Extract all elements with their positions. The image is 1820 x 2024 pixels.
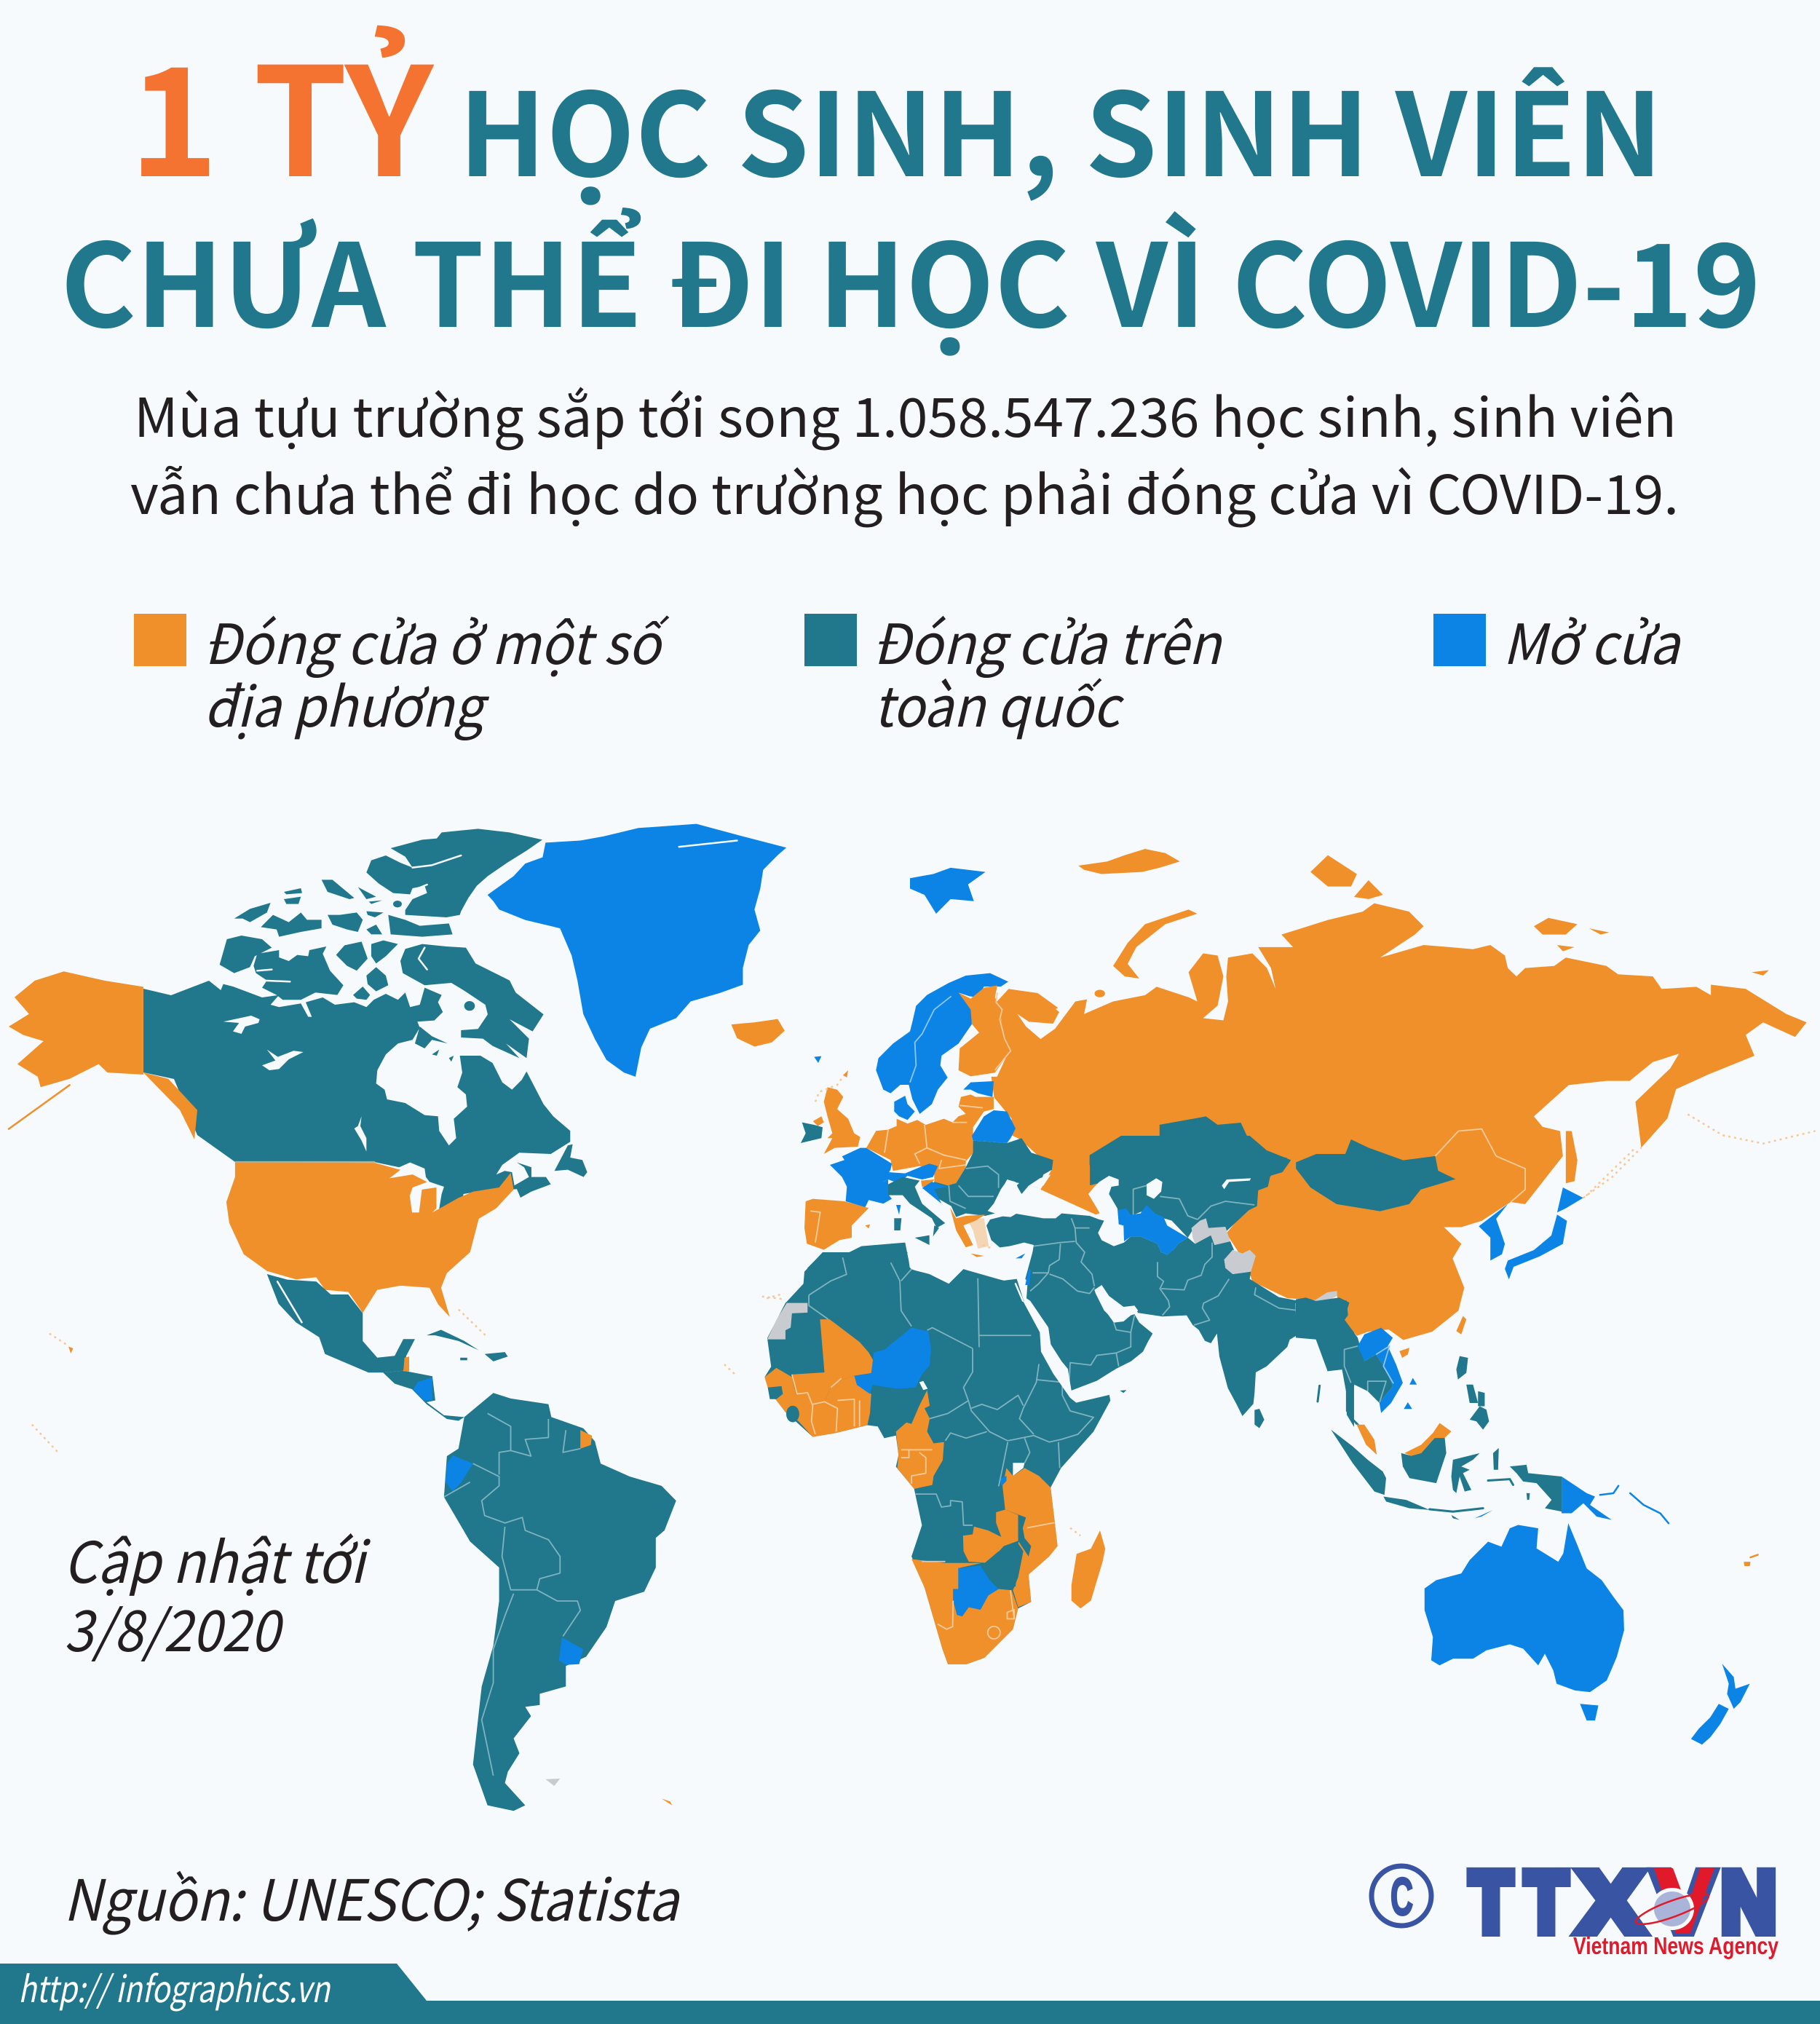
islands: Arctic Russia (1078, 849, 1769, 1183)
Laos and Vietnam (1358, 1328, 1403, 1413)
Turkmenistan (1117, 1205, 1188, 1254)
logo inner red V (1654, 1868, 1714, 1933)
Balearic islands (865, 1225, 870, 1228)
Baffin Island (400, 944, 544, 1058)
TTXVN logo: N (1721, 1854, 1776, 1950)
Tasmania (1580, 1704, 1599, 1720)
subtitle text: Mùa tựu trường sắp tới song 1.058.547.236 học sinh, sinh viên (134, 375, 1677, 453)
small Pacific and Atlantic islands (32, 1334, 737, 1806)
TTXVN logo: V (1653, 1854, 1714, 1950)
Alaska (9, 971, 143, 1087)
Indonesian Papua (1510, 1465, 1562, 1511)
Kazakhstan and central Asia (1090, 1136, 1291, 1238)
Namibia and South Africa (911, 1559, 1018, 1664)
map: Greenland and Iceland (488, 824, 786, 1077)
Caribbean islands (427, 1330, 508, 1361)
Israel (1025, 1269, 1031, 1285)
United States (226, 1163, 514, 1317)
Greenland (488, 824, 786, 1077)
legend item: partial closure (134, 600, 669, 743)
legend item: partial closure: Đóng cửa ở một số (203, 600, 669, 680)
gray no-data areas (1192, 1218, 1337, 1307)
north Africa (786, 1243, 1032, 1311)
Malawi (1018, 1517, 1031, 1557)
Madagascar (1072, 1530, 1105, 1608)
map: Africa (762, 1252, 1110, 1664)
Lake Victoria (1013, 1463, 1024, 1476)
Denmark (894, 1096, 915, 1120)
Burundi (1000, 1476, 1006, 1486)
TTXVN logo: T (1525, 1854, 1567, 1950)
update date note (63, 1518, 371, 1668)
Kola peninsula (1007, 990, 1059, 1024)
legend item: open: Mở cửa (1503, 600, 1682, 680)
TTXVN logo: X (1578, 1854, 1643, 1950)
Philippines (1456, 1356, 1489, 1430)
Java and Lesser Sunda (1383, 1497, 1430, 1510)
footer band with website tab: http:// infographics.vn (18, 1961, 331, 2013)
Iceland (731, 1019, 785, 1047)
Socotra (1120, 1390, 1126, 1393)
Slovenia (921, 1179, 934, 1187)
peninsular Malaysia (1357, 1425, 1377, 1455)
update date note: 3/8/2020 (64, 1586, 285, 1668)
Canada mainland (143, 981, 570, 1216)
Zimbabwe (982, 1551, 1018, 1590)
title: 1 TỶ (129, 1, 435, 220)
Taiwan (1456, 1316, 1466, 1335)
logo globe (1633, 1888, 1712, 1930)
title (60, 1, 1761, 360)
Newfoundland (555, 1145, 587, 1177)
Mali (792, 1319, 874, 1406)
United Kingdom (824, 1087, 860, 1154)
Finland (959, 985, 1010, 1076)
Sulawesi (1452, 1453, 1480, 1493)
Myanmar, Thailand, Cambodia (1296, 1297, 1393, 1425)
Spain and Portugal (804, 1199, 869, 1250)
Norway and Sweden (876, 973, 1008, 1114)
Turkey, Arabia, Iran and India block (986, 1214, 1354, 1427)
title: CHƯA THỂ ĐI HỌC VÌ COVID-19 (60, 194, 1761, 360)
Niger (855, 1328, 931, 1394)
legend item: nationwide closure: toàn quốc (874, 663, 1125, 743)
Mexico (267, 1274, 415, 1372)
copyright symbol (1372, 1866, 1431, 1926)
Western Sahara (767, 1303, 807, 1340)
footer band with website tab (0, 1961, 1820, 2024)
Greece and Aegean islands (950, 1207, 985, 1247)
Cameroon, Gabon, Congo (896, 1390, 944, 1489)
TTXVN logo: T (1470, 1854, 1512, 1950)
Africa continent (764, 1252, 1110, 1664)
South America (444, 1393, 676, 1811)
legend item: nationwide closure: Đóng cửa trên (872, 600, 1224, 680)
Ukraine, Romania, Balkans (932, 1138, 1053, 1217)
Korea (1479, 1204, 1508, 1260)
update date note: Cập nhật tới (63, 1518, 371, 1600)
Switzerland and Austria (883, 1163, 938, 1183)
Zambia (963, 1510, 1018, 1563)
title: HỌC SINH, SINH VIÊN (459, 43, 1663, 210)
Japan (1505, 1187, 1583, 1279)
map: Russia, China and north Asia (910, 849, 1816, 1340)
Svalbard (910, 868, 986, 914)
map: United States and Alaska (9, 971, 514, 1317)
copyright symbol: C (1390, 1868, 1413, 1926)
legend item: nationwide closure (804, 600, 1224, 743)
Arctic archipelago (220, 829, 542, 1062)
Australia (1425, 1523, 1624, 1692)
Papua New Guinea (1562, 1477, 1612, 1520)
map: South-East Asia, Australia and Pacific (1296, 1297, 1758, 1744)
New Zealand (1691, 1664, 1750, 1744)
legend item: partial closure: địa phương (204, 663, 490, 743)
TTXVN logo (1470, 1854, 1776, 1950)
source note: Nguồn: UNESCO; Statista (63, 1856, 681, 1937)
Sri Lanka (1254, 1409, 1265, 1428)
Botswana (953, 1565, 999, 1616)
map: Mexico, Central and South America (32, 1274, 737, 1811)
Hainan (1399, 1348, 1409, 1358)
Ecuador (446, 1455, 473, 1491)
map: Europe and north Africa coast (767, 973, 1059, 1311)
west Africa coast (764, 1368, 871, 1437)
world map (9, 824, 1816, 1811)
Estonia (963, 1081, 994, 1097)
subtitle text: vẫn chưa thể đi học do trường học phải đóng cửa vì COVID-19. (130, 452, 1679, 530)
Belarus (972, 1110, 1016, 1143)
Italy and islands (888, 1177, 945, 1245)
Croatia (922, 1182, 948, 1203)
map: Middle East, central and south Asia (986, 1136, 1354, 1428)
Paracel and Spratly islands (1404, 1378, 1417, 1409)
Sumatra (1331, 1430, 1386, 1495)
Fiji (1744, 1562, 1751, 1566)
Nicaragua (414, 1377, 432, 1400)
Tanzania and Mozambique (1002, 1468, 1058, 1607)
subtitle text (130, 375, 1679, 530)
Red Sea and Gulf of Aden (1016, 1254, 1133, 1403)
Belize (403, 1356, 409, 1372)
Mongolia (1296, 1139, 1455, 1211)
France (830, 1148, 892, 1207)
Lake Chad (919, 1381, 927, 1390)
Uruguay (559, 1637, 583, 1665)
inland seas (992, 1174, 1251, 1323)
central Europe and Baltics (866, 1094, 994, 1185)
map: Canada (143, 829, 587, 1216)
Cyprus (1016, 1254, 1025, 1258)
Canadian lakes (223, 1016, 366, 1152)
Kazakhstan north (1090, 1116, 1287, 1236)
Borneo (1401, 1436, 1447, 1483)
Central America (383, 1371, 464, 1421)
legend (134, 600, 1682, 743)
Ireland (801, 1123, 823, 1143)
French Guiana (580, 1430, 592, 1449)
